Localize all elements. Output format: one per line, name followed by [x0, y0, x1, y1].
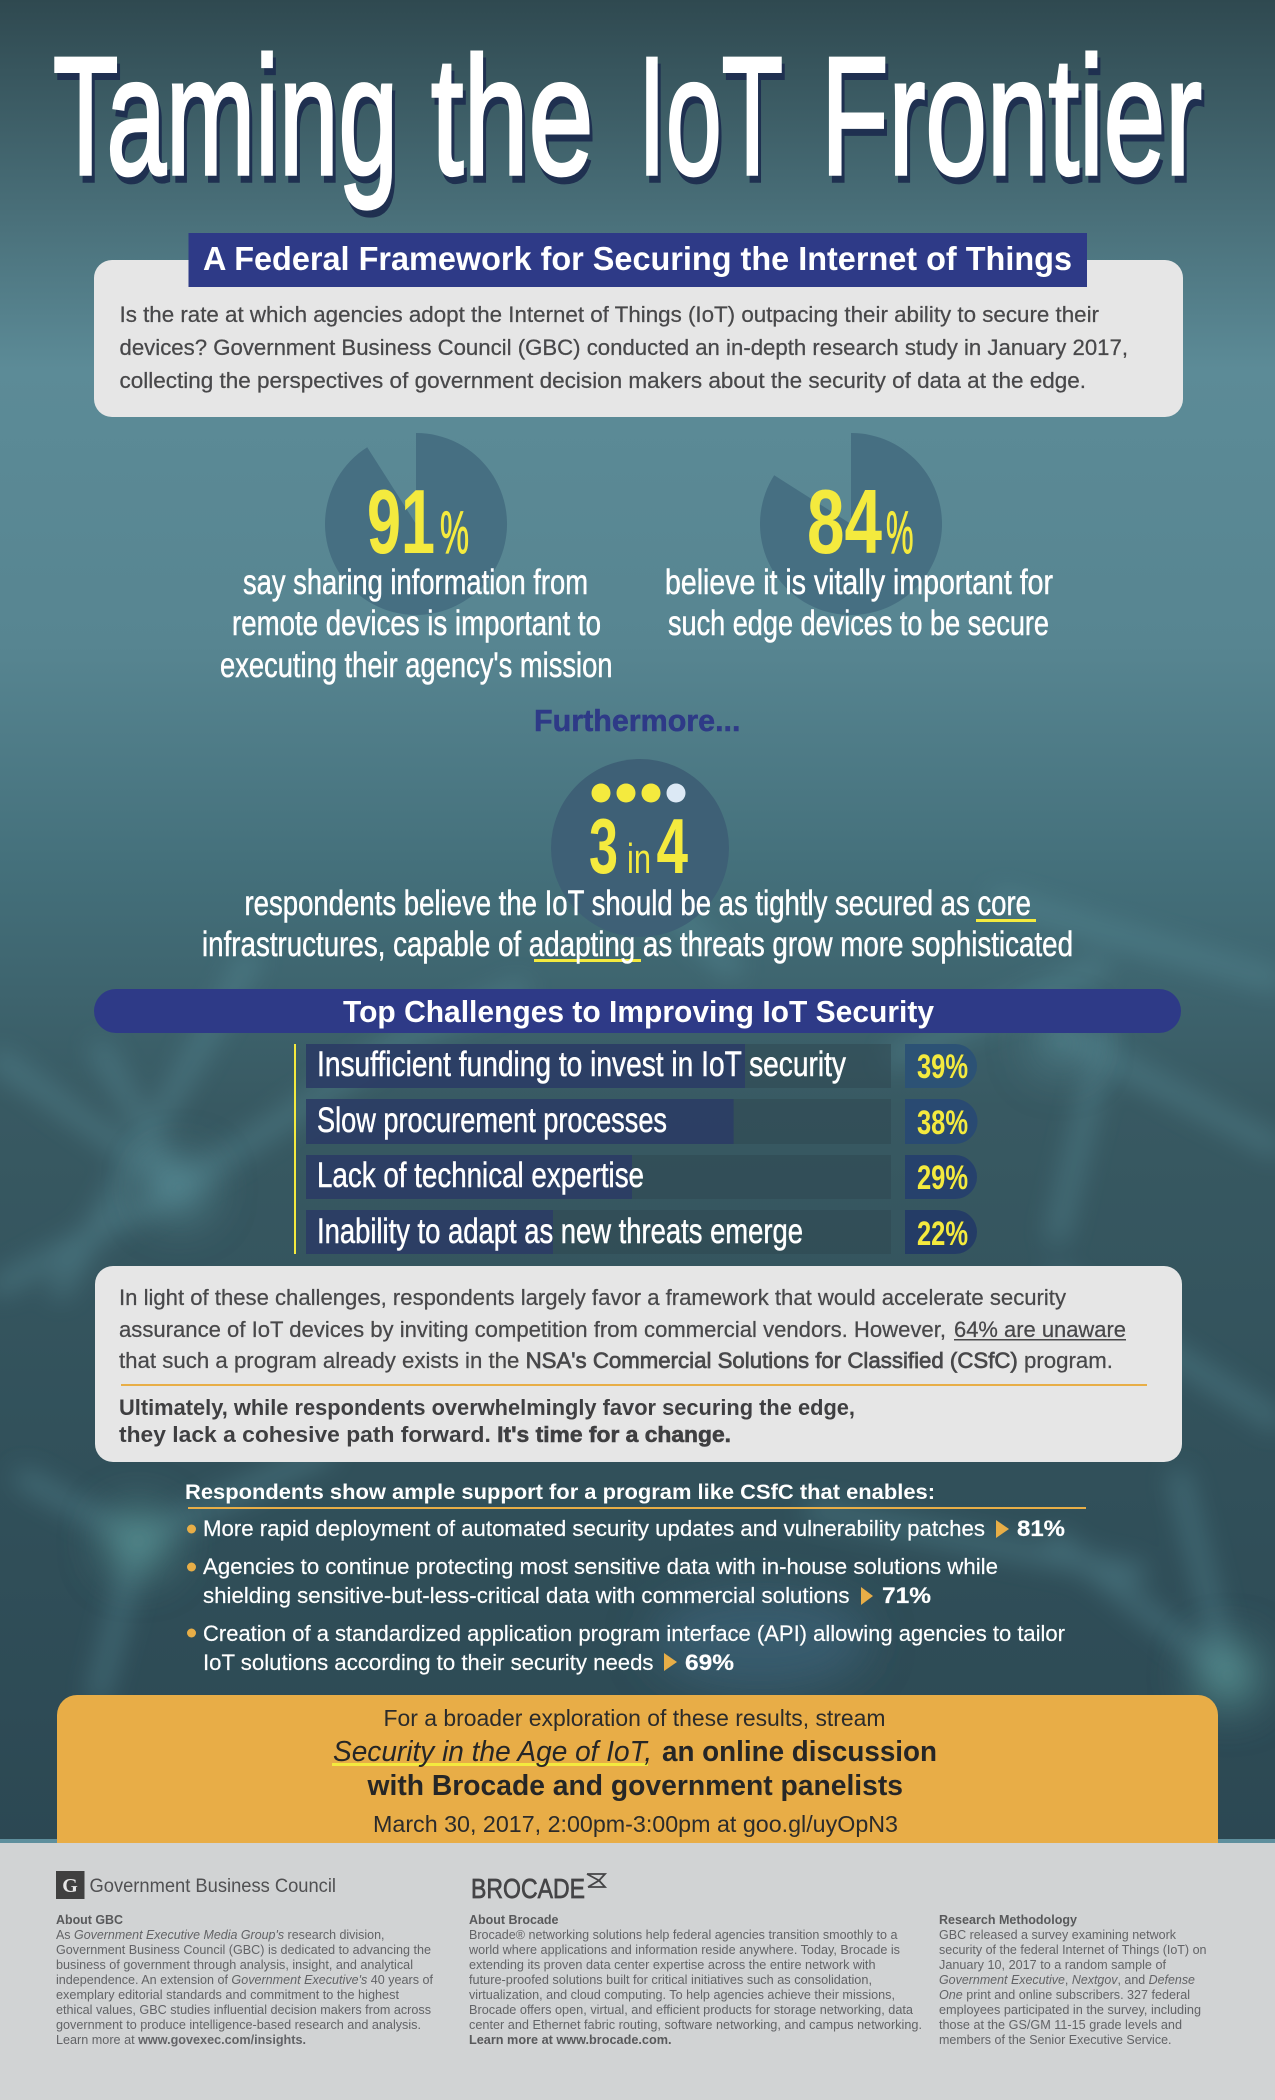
callout: online discussion: with Brocade and government panelists [367, 1770, 903, 1802]
number: 4 [656, 802, 688, 890]
caption [665, 563, 1053, 643]
panel: conclusion: In light of these challenges, respondents largely favor a framework that would accelerate security [119, 1285, 1067, 1310]
pie chart: 91% [325, 433, 507, 615]
list item: 81%: 81% [1017, 1516, 1065, 1541]
about Brocade: Brocade offers open, virtual, and efficient products for storage networking, data [469, 2003, 913, 2017]
list item: 69%: IoT solutions according to their security needs [203, 1650, 654, 1675]
caption [202, 884, 1073, 964]
stat: 91 percent [220, 433, 612, 685]
title: Taming [56, 29, 401, 217]
about GBC: government to produce intelligence-based research and analysis. [56, 2018, 421, 2032]
bar: funding: 39% [917, 1048, 968, 1086]
research methodology: employees participated in the survey, including [939, 2003, 1201, 2017]
bar: procurement: Slow procurement processes [317, 1101, 667, 1140]
about Brocade: future-proofed solutions built for critical initiatives such as consolidation, [469, 1973, 872, 1987]
title [53, 22, 1205, 217]
about GBC: As Government Executive Media Group's research division, [56, 1928, 384, 1942]
heading: top challenges: Top Challenges to Improving IoT Security [343, 994, 935, 1029]
callout: online discussion [57, 1695, 1218, 1843]
bar: procurement [306, 1099, 978, 1144]
callout: online discussion: Security in the Age of IoT, [333, 1736, 652, 1768]
about GBC: exemplary editorial standards and commitment to the highest [56, 1988, 400, 2002]
caption: infrastructures, capable of adapting as threats grow more sophisticated [202, 925, 1073, 964]
title: the [431, 22, 594, 210]
pie chart: 84% [760, 433, 942, 615]
research methodology: security of the federal Internet of Things (IoT) on [939, 1943, 1207, 1957]
about GBC: About GBC [56, 1913, 123, 1927]
title: Taming [53, 22, 398, 210]
bar: expertise [306, 1155, 977, 1199]
logo: Government Business Council: G [62, 1875, 78, 1897]
list item: 71% [187, 1554, 998, 1608]
subtitle banner [188, 233, 1087, 287]
icon: four dots [592, 784, 686, 802]
list item: 69% [187, 1621, 1065, 1675]
about Brocade: About Brocade [469, 1913, 559, 1927]
about Brocade: center and Ethernet fabric routing, software networking, and campus networking. [469, 2018, 922, 2032]
caption: executing their agency's mission [220, 646, 612, 685]
logo: Government Business Council: Government Business Council [90, 1875, 336, 1897]
caption [220, 563, 612, 685]
research methodology: members of the Senior Executive Service. [939, 2033, 1172, 2047]
number: 91 [367, 472, 435, 573]
research methodology [939, 1913, 1207, 2047]
caption: believe it is vitally important for [665, 563, 1053, 602]
research methodology: Research Methodology [939, 1913, 1077, 1927]
intro text: devices? Government Business Council (GBC) conducted an in-depth research study in January 2017, [120, 335, 1128, 360]
caption: respondents believe the IoT should be as tightly secured as core [244, 884, 1031, 923]
about GBC: independence. An extension of Government Executive's 40 years of [56, 1973, 434, 1987]
number: % [440, 499, 469, 566]
research methodology: those at the GS/GM 11-15 grade levels and [939, 2018, 1182, 2032]
number [589, 802, 688, 890]
title: IoT [638, 22, 783, 210]
about Brocade: extending its proven data center expertise across the entire network with [469, 1958, 876, 1972]
list item: 71%: shielding sensitive-but-less-critical data with commercial solutions [203, 1583, 850, 1608]
callout: online discussion: an online discussion [662, 1736, 937, 1768]
bar: threats: Inability to adapt as new threats emerge [317, 1212, 803, 1251]
list item: 69%: Creation of a standardized application program interface (API) allowing agencies to tailor [203, 1621, 1065, 1646]
heading: top challenges [94, 989, 1181, 1033]
bar chart: challenges [294, 1044, 978, 1254]
number: % [886, 499, 914, 566]
panel: conclusion: Ultimately, while respondents overwhelmingly favor securing the edge, [119, 1395, 855, 1420]
bar: funding: Insufficient funding to invest in IoT security [317, 1045, 846, 1084]
about Brocade: world where applications and information reside anywhere. Today, Brocade is [468, 1943, 900, 1957]
about Brocade [468, 1913, 922, 2047]
number: 84 [807, 472, 882, 573]
list item: 69%: 69% [685, 1650, 734, 1675]
title: IoT [641, 29, 786, 217]
research methodology: GBC released a survey examining network [939, 1928, 1177, 1942]
stat: 84 percent [665, 433, 1053, 643]
about GBC: business of government through analysis, insight, and analytical [56, 1958, 413, 1972]
research methodology: Government Executive, Nextgov, and Defense [939, 1973, 1195, 1987]
caption: say sharing information from [243, 563, 588, 602]
list item: 71%: Agencies to continue protecting most sensitive data with in-house solutions while [203, 1554, 998, 1579]
panel: conclusion: that such a program already exists in the NSA's Commercial Solutions for Classified (CSfC) program. [119, 1348, 1113, 1373]
list heading: Respondents show ample support for a program like CSfC that enables: [185, 1480, 935, 1504]
panel: conclusion: 64% are unaware [954, 1317, 1126, 1342]
intro text [120, 302, 1128, 393]
footer panel [0, 1843, 1275, 2100]
intro text: collecting the perspectives of government decision makers about the security of data at the edge. [120, 368, 1086, 393]
logo: Government Business Council [56, 1871, 336, 1899]
panel: conclusion: assurance of IoT devices by inviting competition from commercial vendors. However, [119, 1317, 946, 1342]
list: CSfC support [185, 1480, 1086, 1675]
about Brocade: Brocade® networking solutions help federal agencies transition smoothly to a [469, 1928, 898, 1942]
heading: furthermore: Furthermore... [534, 703, 740, 738]
logo: Brocade: BROCADE [471, 1873, 585, 1904]
panel: introduction [94, 233, 1183, 417]
list item: 71%: 71% [882, 1583, 931, 1608]
footer background [0, 1839, 1275, 1843]
number: in [627, 835, 651, 882]
bar: expertise: 29% [917, 1159, 968, 1197]
caption: such edge devices to be secure [668, 604, 1049, 643]
research methodology: One print and online subscribers. 327 federal [939, 1988, 1190, 2002]
stat: 3 in 4 [202, 759, 1073, 964]
bar: procurement: 38% [917, 1104, 968, 1142]
about Brocade: virtualization, and cloud computing. To help agencies achieve their missions, [469, 1988, 895, 2002]
bar: expertise: Lack of technical expertise [317, 1156, 644, 1195]
about GBC: Learn more at www.govexec.com/insights. [56, 2033, 306, 2047]
research methodology: January 10, 2017 to a random sample of [939, 1958, 1167, 1972]
circle [551, 759, 729, 937]
about GBC: Government Business Council (GBC) is dedicated to advancing the [56, 1943, 431, 1957]
title: the [434, 29, 596, 217]
callout: online discussion: For a broader exploration of these results, stream [384, 1705, 886, 1731]
caption: remote devices is important to [232, 604, 601, 643]
subtitle banner: A Federal Framework for Securing the Internet of Things [203, 240, 1072, 277]
intro text: Is the rate at which agencies adopt the Internet of Things (IoT) outpacing their ability to secure their [120, 302, 1099, 327]
number: 3 [589, 802, 618, 890]
list item: 81%: More rapid deployment of automated security updates and vulnerability patches [203, 1516, 985, 1541]
panel: conclusion [95, 1266, 1182, 1462]
about Brocade: Learn more at www.brocade.com. [469, 2033, 672, 2047]
callout: online discussion: March 30, 2017, 2:00pm-3:00pm at goo.gl/uyOpN3 [373, 1811, 898, 1837]
about GBC: ethical values, GBC studies influential decision makers from across [56, 2003, 431, 2017]
bar: threats: 22% [917, 1215, 968, 1253]
about GBC [56, 1913, 434, 2047]
panel: conclusion: they lack a cohesive path forward. It's time for a change. [119, 1422, 731, 1447]
